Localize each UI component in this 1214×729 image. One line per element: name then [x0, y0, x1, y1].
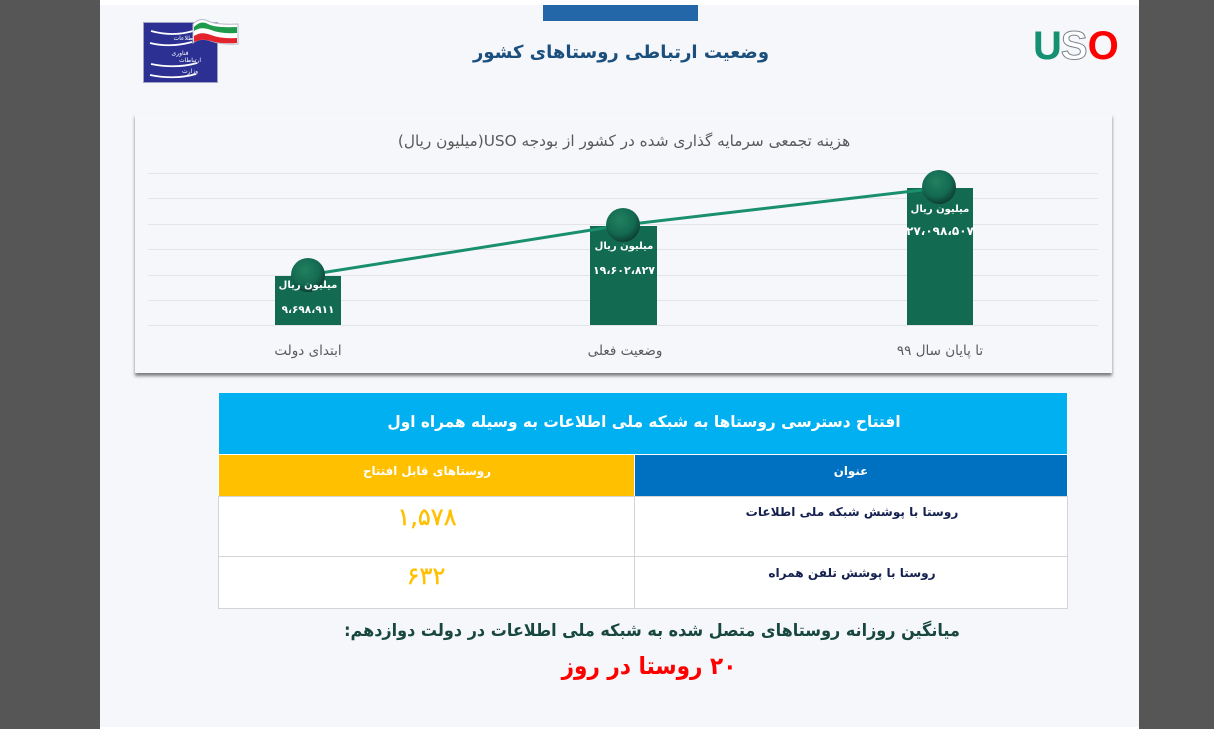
- logo: USO: USO: [1033, 24, 1119, 68]
- bar value labels: میلیون ریال: [279, 280, 337, 291]
- bar value labels: ۱۹،۶۰۲،۸۲۷: [593, 264, 655, 277]
- row 2 value: ۶۳۲: [407, 562, 445, 590]
- logo: ministry emblem with flag: وزارت: [182, 68, 198, 75]
- category labels: [274, 343, 983, 359]
- bar value labels: ۹،۶۹۸،۹۱۱: [282, 304, 334, 316]
- logo: ministry emblem with flag: اطلاعات: [173, 35, 195, 42]
- category labels: تا پایان سال ۹۹: [897, 343, 983, 359]
- chart title: هزینه تجمعی سرمایه گذاری شده در کشور از بودجه USO(میلیون ریال): [398, 132, 850, 150]
- markers: [291, 170, 956, 292]
- panel: investment chart: [135, 114, 1112, 373]
- table title: [219, 393, 1067, 454]
- category labels: وضعیت فعلی: [588, 343, 662, 359]
- callout: daily average: میانگین روزانه روستاهای متصل شده به شبکه ملی اطلاعات در دولت دوازدهم:: [344, 621, 960, 641]
- combo chart: bars and line: [148, 170, 1098, 359]
- table grid: [218, 496, 1068, 609]
- table: village access: [218, 393, 1068, 609]
- bar value labels: میلیون ریال: [911, 204, 969, 215]
- header: title: [635, 455, 1067, 496]
- table: village access: روستاهای قابل افتتاح: [363, 464, 491, 478]
- bars: [275, 188, 973, 325]
- row 2 label: روستا با پوشش تلفن همراه: [768, 566, 936, 580]
- top blue tab: [543, 5, 698, 21]
- category labels: ابتدای دولت: [274, 343, 342, 359]
- row 1 label: روستا با پوشش شبکه ملی اطلاعات: [746, 505, 958, 519]
- bar value labels: [279, 204, 975, 316]
- title: وضعیت ارتباطی روستاهای کشور: [473, 42, 769, 63]
- trend line: [308, 188, 939, 275]
- logo: ministry emblem with flag: فناوری: [172, 50, 189, 57]
- logo: ministry emblem with flag: ارتباطات: [179, 57, 201, 64]
- logo: ministry emblem with flag: [143, 19, 238, 83]
- table: village access: افتتاح دسترسی روستاها به شبکه ملی اطلاعات به وسیله همراه اول: [387, 412, 901, 431]
- callout: 20 villages per day: ۲۰ روستا در روز: [562, 652, 736, 680]
- header: openable villages: [219, 455, 634, 496]
- table: village access: عنوان: [834, 464, 868, 478]
- bar value labels: میلیون ریال: [595, 241, 653, 252]
- bar value labels: ۲۷،۰۹۸،۵۰۷: [906, 224, 975, 238]
- row 1 value: ۱,۵۷۸: [397, 503, 457, 531]
